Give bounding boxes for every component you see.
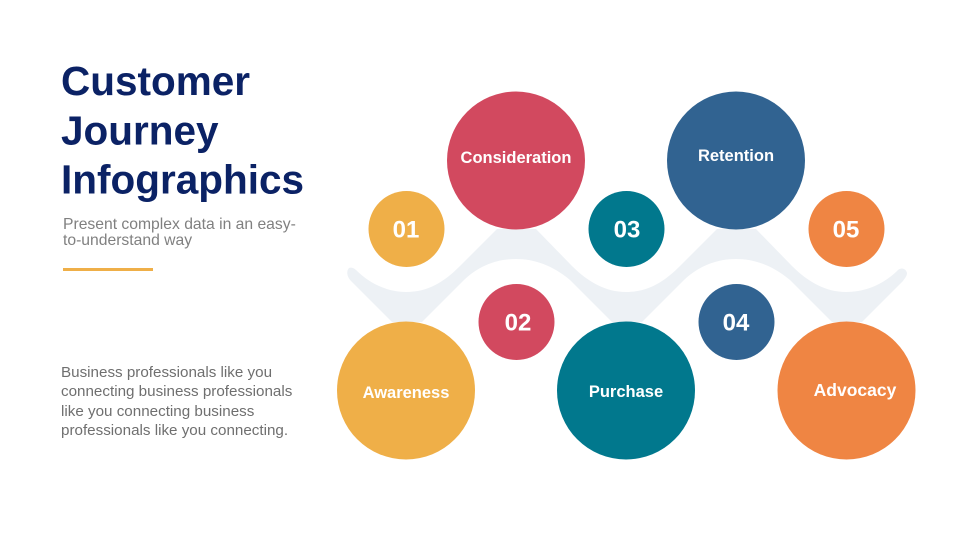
step: purchase [557,322,695,460]
body text: like you connecting business [61,403,255,420]
title: Customer [61,58,250,104]
title: Infographics [61,156,304,202]
title: Journey [61,108,219,154]
step: retention: Retention [698,147,774,165]
number 01 [368,191,444,267]
accent line [63,268,153,271]
body text: professionals like you connecting. [61,422,288,439]
step: retention [667,92,805,230]
number 04 [698,284,774,360]
subtitle: to-understand way [63,232,192,249]
body text: connecting business professionals [61,383,293,400]
number 05: 05 [833,216,859,244]
title [61,58,304,202]
step: awareness [337,322,475,460]
number 02: 02 [505,310,531,336]
body text: Business professionals like you [61,364,272,381]
step: advocacy: Advocacy [814,380,897,400]
step: consideration [447,92,585,230]
number 02 [478,284,554,360]
number 04: 04 [723,310,750,336]
number 05 [808,191,884,267]
step: advocacy [778,322,916,460]
step: awareness: Awareness [363,384,449,402]
step: consideration: Consideration [461,149,571,167]
number 03: 03 [614,216,640,244]
subtitle [63,216,296,249]
subtitle: Present complex data in an easy- [63,216,296,233]
number 03 [588,191,664,267]
number 01: 01 [393,216,419,244]
body text [61,364,293,439]
step: purchase: Purchase [589,383,663,401]
wave connector [347,229,907,322]
